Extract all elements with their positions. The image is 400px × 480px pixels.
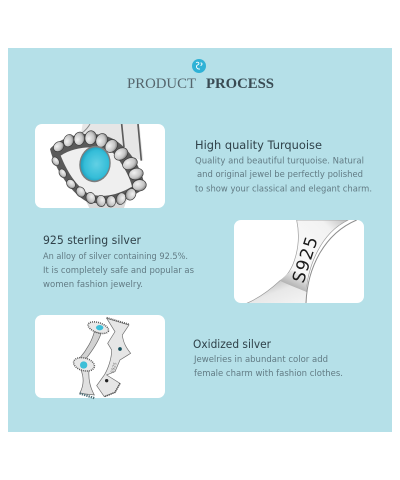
text block: high quality turquoise: and original jewel be perfectly polished <box>197 170 363 180</box>
turquoise stone <box>79 146 111 182</box>
title: PRODUCT <box>127 76 196 92</box>
panel: S925 stamp photo <box>234 220 364 303</box>
title <box>127 76 274 92</box>
black stones <box>118 347 122 351</box>
text block: oxidized silver: Oxidized silver <box>193 337 271 351</box>
text block: 925 sterling silver: women fashion jewelry. <box>43 280 143 290</box>
background panel <box>8 48 392 432</box>
S925 stamp: S925 <box>289 234 323 286</box>
panel: turquoise eye photo <box>35 124 165 208</box>
ring band <box>280 220 348 292</box>
text block: oxidized silver: female charm with fashion clothes. <box>194 369 343 379</box>
text block: high quality turquoise <box>195 138 372 194</box>
text block: 925 sterling silver: It is completely safe and popular as <box>43 266 194 276</box>
eye body <box>50 134 145 203</box>
beads <box>50 130 147 207</box>
text block: high quality turquoise: Quality and beautiful turquoise. Natural <box>195 156 364 166</box>
ring front band <box>80 332 101 360</box>
icon: brand logo <box>192 59 206 73</box>
title: PROCESS <box>206 76 274 92</box>
ring back band <box>97 318 131 397</box>
text block: oxidized silver <box>193 337 343 379</box>
text block: high quality turquoise: to show your classical and elegant charm. <box>195 184 372 194</box>
ring band <box>80 124 143 161</box>
lower eye <box>72 355 96 373</box>
upper eye <box>87 320 110 336</box>
text block: 925 sterling silver <box>43 233 194 290</box>
text block: 925 sterling silver: An alloy of silver containing 92.5%. <box>43 252 188 262</box>
ring stamp: S925 <box>110 361 119 374</box>
panel: full ring photo <box>35 315 165 398</box>
text block: oxidized silver: Jewelries in abundant color add <box>193 355 328 365</box>
text block: 925 sterling silver: 925 sterling silver <box>43 233 141 247</box>
text block: high quality turquoise: High quality Turquoise <box>195 138 322 152</box>
